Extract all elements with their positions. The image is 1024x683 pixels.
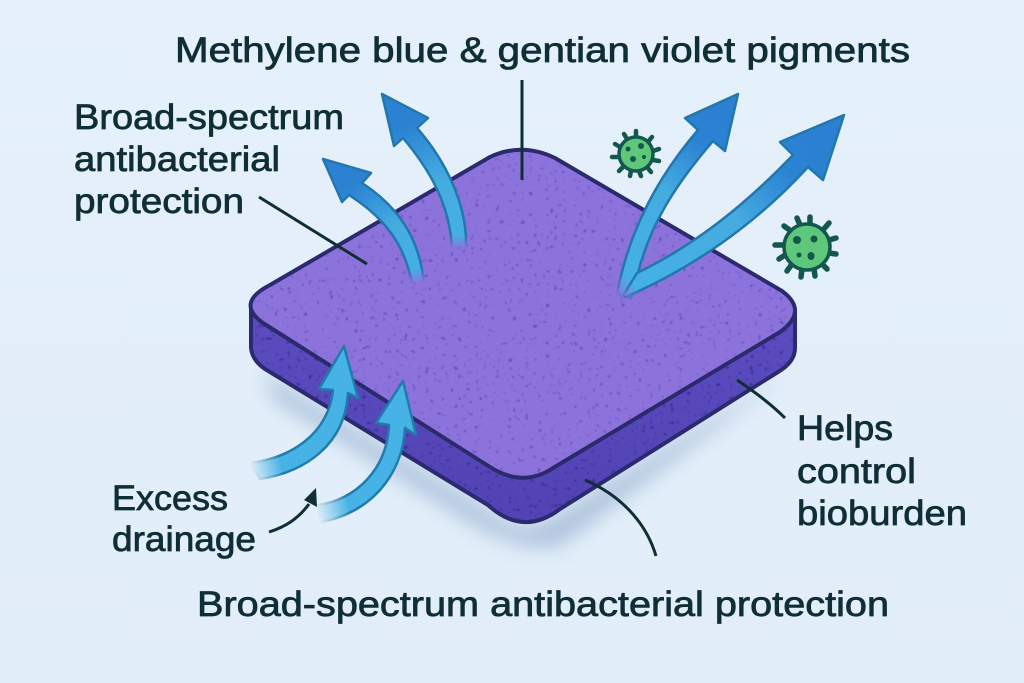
leader: bottom caption to pad (585, 480, 656, 556)
label: broad-spectrum upper left: protection (74, 182, 244, 221)
top face texture (252, 152, 794, 476)
label: excess drainage: Excess (112, 479, 228, 518)
pad shadow (262, 370, 790, 547)
leader: upper left label to pad (259, 197, 367, 264)
label: helps control bioburden: control (797, 452, 916, 491)
arrow: upper left short (323, 159, 424, 284)
label: excess drainage (112, 479, 256, 559)
leader: title to pad (520, 80, 524, 180)
icon: large bacterium (775, 217, 836, 277)
icon: small bacterium (612, 131, 659, 176)
arrow: drainage lower left two (318, 381, 416, 522)
arrow: drainage lower left one (250, 346, 358, 479)
arrow: drainage label pointer (269, 488, 317, 532)
label: helps control bioburden (797, 409, 967, 533)
foam dressing pad (251, 150, 795, 547)
title: Methylene blue & gentian violet pigments (175, 31, 910, 70)
arrows: drainage absorbed from lower left (250, 346, 416, 522)
label: broad-spectrum upper left (74, 98, 344, 221)
infographic canvas (75, 36, 965, 624)
side wall texture (253, 312, 793, 520)
arrow: upper right steep and wide (617, 94, 844, 299)
arrows: upward release from top face (323, 94, 844, 299)
label: bottom caption: Broad-spectrum antibacterial protection (197, 585, 889, 624)
pad top face (251, 150, 795, 478)
pad side wall (251, 307, 795, 522)
label: excess drainage: drainage (112, 520, 256, 559)
arrow: upper left tall (382, 94, 466, 249)
label: broad-spectrum upper left: Broad-spectrum (74, 98, 344, 137)
label: broad-spectrum upper left: antibacterial (74, 140, 280, 179)
leader: bioburden label to pad (737, 380, 785, 418)
label: helps control bioburden: bioburden (797, 494, 967, 533)
label: helps control bioburden: Helps (797, 409, 893, 448)
